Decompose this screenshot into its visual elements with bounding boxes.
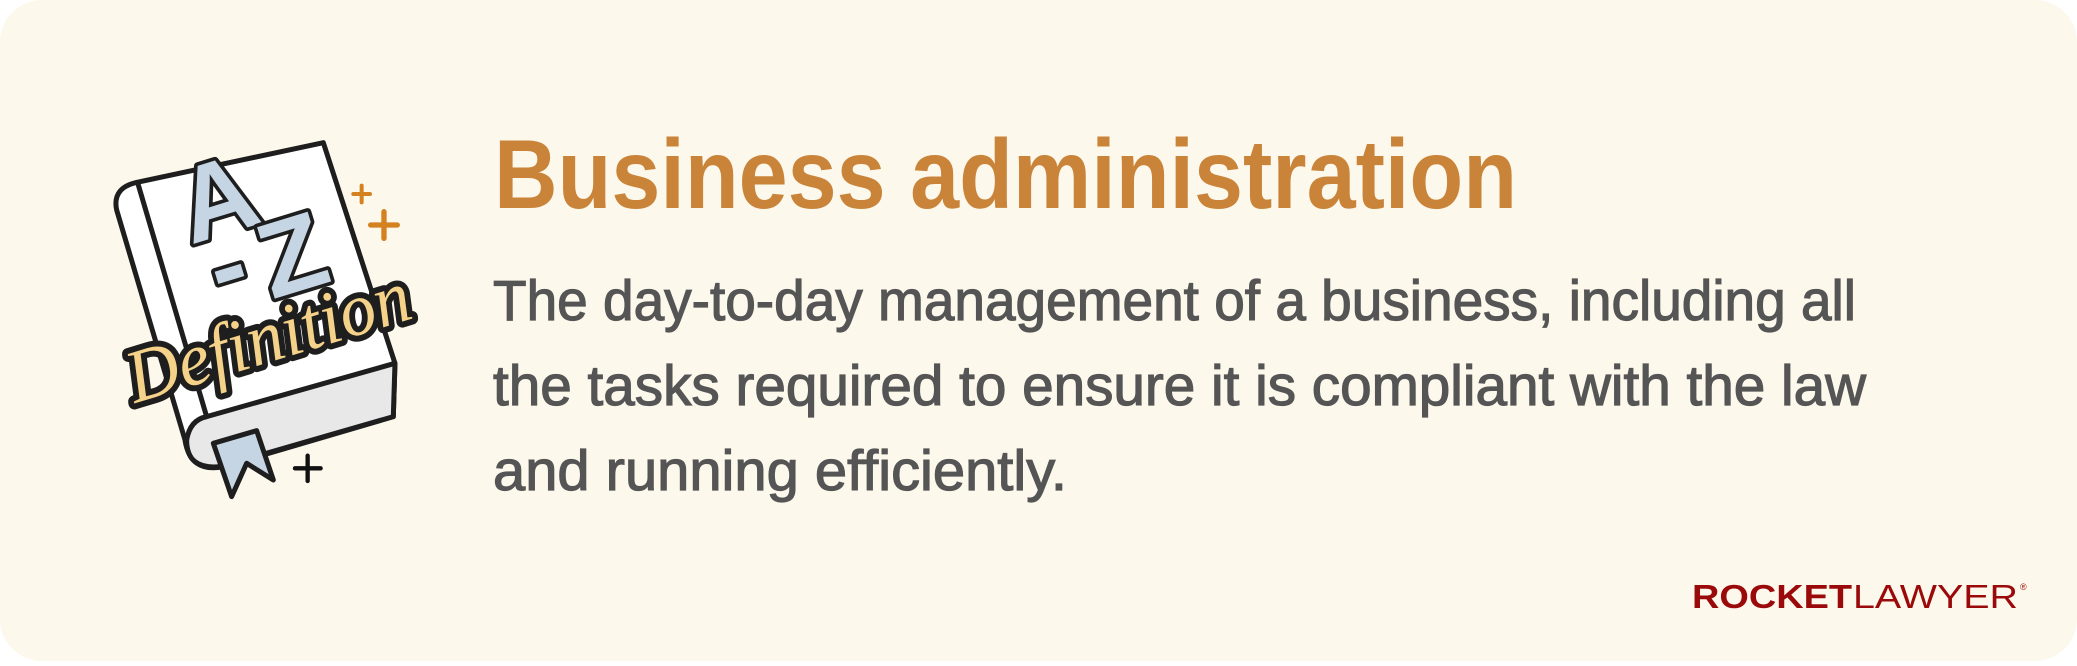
logo: Rocket Lawyer: LAWYER bbox=[1853, 578, 2018, 615]
logo: Rocket Lawyer: ROCKET bbox=[1692, 578, 1852, 615]
title: Business administration bbox=[494, 119, 1517, 229]
icon: definition book: Z bbox=[243, 188, 341, 321]
definition text bbox=[493, 269, 1867, 503]
definition text: the tasks required to ensure it is compliant with the law bbox=[493, 354, 1867, 418]
icon: definition book: - bbox=[192, 202, 261, 327]
icon: definition book: A bbox=[163, 129, 271, 267]
logo: Rocket Lawyer: ® bbox=[2020, 582, 2027, 592]
icon: definition book bbox=[115, 129, 420, 497]
logo: Rocket Lawyer bbox=[1692, 578, 2027, 615]
definition text: and running efficiently. bbox=[493, 439, 1067, 503]
definition text: The day-to-day management of a business, including all bbox=[493, 269, 1856, 333]
icon: definition book: Definition bbox=[115, 254, 420, 420]
